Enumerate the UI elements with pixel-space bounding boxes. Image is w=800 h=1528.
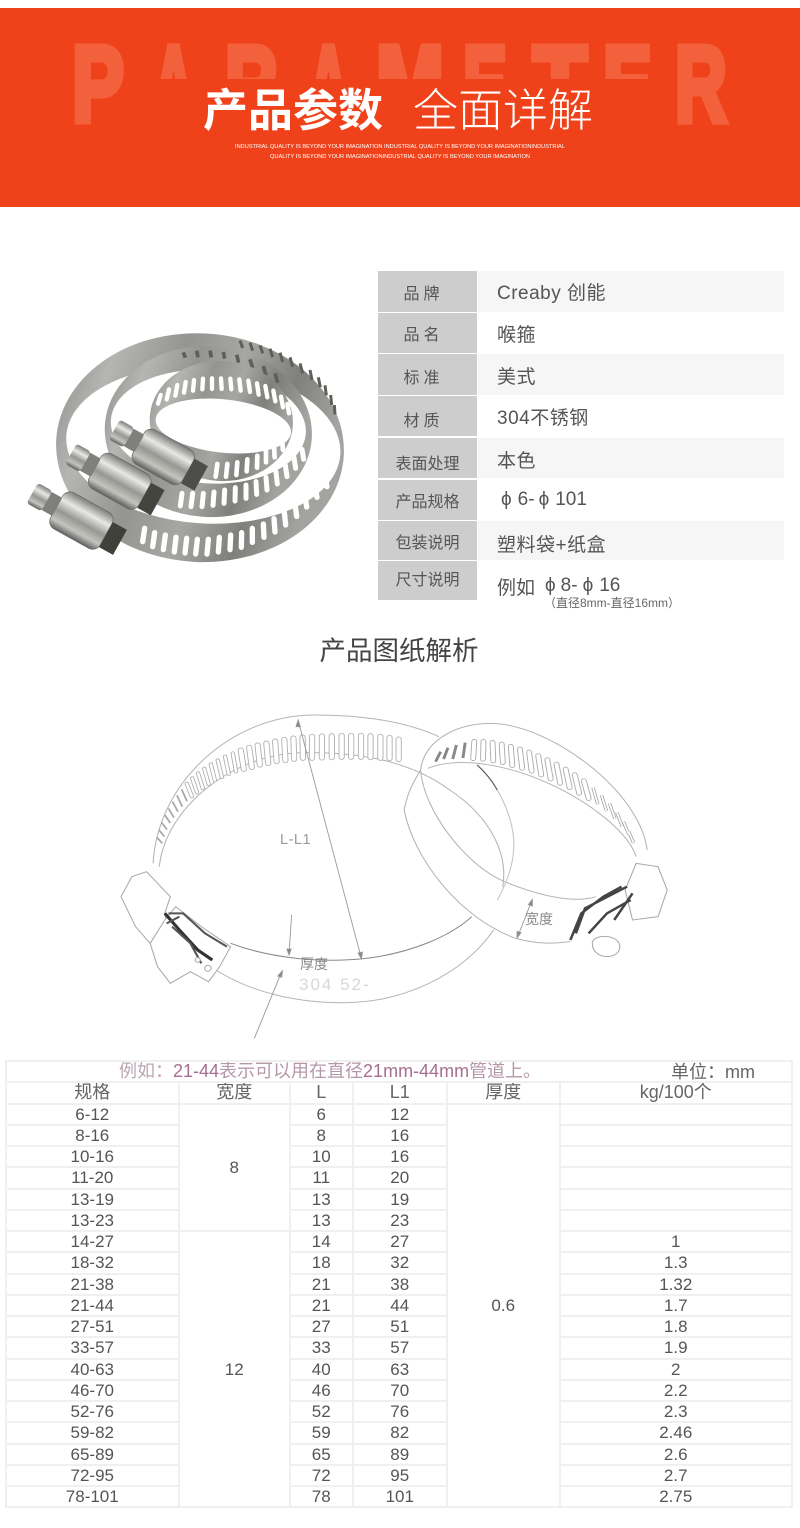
table note row: 20 xyxy=(390,1168,409,1187)
table note row: 6-12 xyxy=(75,1105,109,1124)
table note row: 例如：21-44表示可以用在直径21mm-44mm管道上。 xyxy=(119,1061,541,1081)
screw housing 2 xyxy=(61,437,168,520)
table note row: 16 xyxy=(390,1147,409,1166)
table note row: 12 xyxy=(225,1360,244,1379)
watermark word PARAMETER: T xyxy=(533,23,587,144)
diagram label: L-L1: L-L1 xyxy=(280,832,311,848)
table note row: 38 xyxy=(390,1275,409,1294)
banner subtitle xyxy=(235,144,565,160)
screw housing 3 xyxy=(22,475,130,560)
row: size note: （直径8mm-直径16mm） xyxy=(544,596,680,610)
table note row: 1.7 xyxy=(664,1296,688,1315)
table note row: 0.6 xyxy=(491,1296,515,1315)
screw housing 1 xyxy=(105,413,211,495)
table note row: 57 xyxy=(390,1338,409,1357)
table note row: 76 xyxy=(390,1402,409,1421)
table note row: 10 xyxy=(312,1147,331,1166)
header banner xyxy=(0,8,800,207)
table note row: 40-63 xyxy=(70,1360,114,1379)
table note row: 1.9 xyxy=(664,1338,688,1357)
inner clamp xyxy=(146,356,297,486)
table note row: 89 xyxy=(390,1445,409,1464)
watermark word PARAMETER: P xyxy=(72,23,124,144)
watermark word PARAMETER: A xyxy=(308,23,349,144)
table note row: 单位：mm xyxy=(671,1062,755,1082)
table note row: 6 xyxy=(317,1105,326,1124)
table note row: 21 xyxy=(312,1296,331,1315)
table note row: 11 xyxy=(312,1168,330,1187)
row: size range xyxy=(378,480,587,520)
table note row: 14 xyxy=(312,1232,331,1251)
row: product name: 喉箍 xyxy=(497,324,536,346)
table note row: 13 xyxy=(312,1211,331,1230)
table header row: kg/100个 xyxy=(640,1082,712,1102)
table note row: 72 xyxy=(312,1466,331,1485)
row: size range: ϕ xyxy=(539,489,549,510)
table note row: 65 xyxy=(312,1445,331,1464)
table note row: 1.8 xyxy=(664,1317,688,1336)
table header row: L1 xyxy=(390,1082,410,1102)
row: standard: 美式 xyxy=(497,367,536,388)
technical sketch diagram of clamps xyxy=(120,714,668,1038)
row: brand: Creaby 创能 xyxy=(497,283,606,304)
table note row: 52 xyxy=(312,1402,331,1421)
table header row xyxy=(74,1082,712,1102)
table note row: 2.6 xyxy=(664,1445,688,1464)
watermark word PARAMETER: R xyxy=(675,23,727,144)
table note row: 21-44 xyxy=(70,1296,114,1315)
table note row: 78-101 xyxy=(66,1487,119,1506)
table note row: 13 xyxy=(312,1190,331,1209)
table note row: 18-32 xyxy=(70,1253,114,1272)
specification table xyxy=(378,271,784,610)
table note row: 32 xyxy=(390,1253,409,1272)
row: surface treatment xyxy=(378,438,784,478)
row: surface treatment: 表面处理 xyxy=(395,456,460,473)
table note row: 2.75 xyxy=(659,1487,692,1506)
row: standard xyxy=(378,354,784,395)
table note row: 63 xyxy=(390,1360,409,1379)
table note row: 13-23 xyxy=(70,1211,114,1230)
table note row: 12 xyxy=(390,1105,409,1124)
table note row: 16 xyxy=(390,1126,409,1145)
row: size note: 例如 xyxy=(497,578,535,598)
table note row: 59 xyxy=(312,1423,331,1442)
table note row: 8-16 xyxy=(75,1126,109,1145)
table note row: 51 xyxy=(390,1317,409,1336)
row: size range: 101 xyxy=(555,489,587,510)
table note row: 101 xyxy=(386,1487,414,1506)
diagram stamped marking: 304 52- xyxy=(299,975,371,994)
diameter dimension arrow xyxy=(296,720,362,959)
watermark word PARAMETER xyxy=(72,23,730,144)
row: size note xyxy=(378,561,680,610)
watermark word PARAMETER: A xyxy=(153,23,194,144)
product photo: three stainless steel hose clamps xyxy=(28,333,344,562)
row: size range: 6- xyxy=(518,489,535,510)
table note row: 44 xyxy=(390,1296,409,1315)
table note row xyxy=(66,1061,755,1506)
row: size note: 尺寸说明 xyxy=(395,572,460,589)
row: brand xyxy=(378,271,784,312)
table note row: 1.3 xyxy=(664,1253,688,1272)
table note row: 11-20 xyxy=(71,1168,113,1187)
watermark word PARAMETER: E xyxy=(463,23,507,144)
table note row: 2.7 xyxy=(664,1466,688,1485)
table note row: 8 xyxy=(230,1158,239,1177)
row: packaging xyxy=(378,521,784,560)
row: size note: ϕ xyxy=(545,575,556,596)
left clamp outline xyxy=(153,715,504,1003)
section heading: 产品图纸解析 xyxy=(320,636,478,666)
table note row: 78 xyxy=(312,1487,331,1506)
left clamp screw housing xyxy=(121,872,231,983)
table note row: 65-89 xyxy=(70,1445,114,1464)
row: product name: 品名 xyxy=(403,327,444,344)
table note row: 27 xyxy=(312,1317,331,1336)
row: material: 304不锈钢 xyxy=(497,408,589,428)
right clamp screw housing xyxy=(570,863,667,957)
table note row: 19 xyxy=(390,1190,409,1209)
row: product name xyxy=(378,313,536,353)
banner title: 产品参数 全面详解 xyxy=(203,85,593,136)
table note row: 1.32 xyxy=(659,1275,692,1294)
table note row: 2.3 xyxy=(664,1402,688,1421)
row: size range: ϕ xyxy=(501,489,512,510)
table note row: 72-95 xyxy=(70,1466,114,1485)
row: standard: 标准 xyxy=(403,370,444,387)
thickness arrows xyxy=(254,915,292,1038)
size data table xyxy=(5,1060,793,1508)
outer clamp xyxy=(50,326,350,569)
row: brand: 品牌 xyxy=(403,286,444,302)
watermark word PARAMETER: R xyxy=(225,23,278,144)
table note row: 52-76 xyxy=(70,1402,114,1421)
width arrow xyxy=(517,899,532,938)
table note row: 27 xyxy=(390,1232,409,1251)
table note row: 13-19 xyxy=(70,1190,114,1209)
watermark word PARAMETER: E xyxy=(603,23,652,144)
row: size range: 产品规格 xyxy=(395,494,460,511)
table header row: 宽度 xyxy=(216,1082,252,1102)
diagram label: thickness: 厚度 xyxy=(300,956,328,972)
table note row: 21 xyxy=(312,1275,331,1294)
row: packaging: 塑料袋+纸盒 xyxy=(497,534,606,556)
table note row: 59-82 xyxy=(70,1423,114,1442)
table note row: 46-70 xyxy=(70,1381,114,1400)
table header row: L xyxy=(316,1082,326,1102)
banner subtitle: QUALITY IS BEYOND YOUR IMAGINATIONINDUSTRIAL QUALITY IS BEYOND YOUR IMAGINATION xyxy=(270,154,530,160)
table note row: 10-16 xyxy=(70,1147,114,1166)
row: size note: 16 xyxy=(599,575,620,596)
table note row: 40 xyxy=(312,1360,331,1379)
row: surface treatment: 本色 xyxy=(497,451,536,472)
table note row: 2.46 xyxy=(659,1423,692,1442)
table header row: 厚度 xyxy=(485,1082,521,1102)
table header row: 规格 xyxy=(74,1082,110,1102)
row: size note: 8- xyxy=(561,575,578,596)
row: packaging: 包装说明 xyxy=(395,534,460,552)
row: size note: ϕ xyxy=(583,575,593,596)
diagram label: width: 宽度 xyxy=(525,911,553,927)
row: material xyxy=(378,396,589,436)
table note row: 82 xyxy=(390,1423,409,1442)
table note row: 23 xyxy=(390,1211,409,1230)
table note row: 21-38 xyxy=(70,1275,114,1294)
table note row: 27-51 xyxy=(70,1317,114,1336)
table note row: 1 xyxy=(671,1232,680,1251)
row: material: 材质 xyxy=(403,412,444,430)
table note row: 95 xyxy=(390,1466,409,1485)
table note row: 46 xyxy=(312,1381,331,1400)
table note row: 2.2 xyxy=(664,1381,688,1400)
right clamp outline xyxy=(404,723,647,943)
middle clamp xyxy=(99,339,318,524)
watermark word PARAMETER: M xyxy=(376,23,444,144)
table note row: 8 xyxy=(317,1126,326,1145)
table note row: 33 xyxy=(312,1338,331,1357)
table note row: 18 xyxy=(312,1253,331,1272)
table note row: 33-57 xyxy=(70,1338,114,1357)
table note row: 70 xyxy=(390,1381,409,1400)
banner subtitle: INDUSTRIAL QUALITY IS BEYOND YOUR IMAGINATION INDUSTRIAL QUALITY IS BEYOND YOUR IMAGINATIONINDUSTRIAL xyxy=(235,144,565,150)
table note row: 2 xyxy=(671,1360,680,1379)
table note row: 14-27 xyxy=(70,1232,114,1251)
